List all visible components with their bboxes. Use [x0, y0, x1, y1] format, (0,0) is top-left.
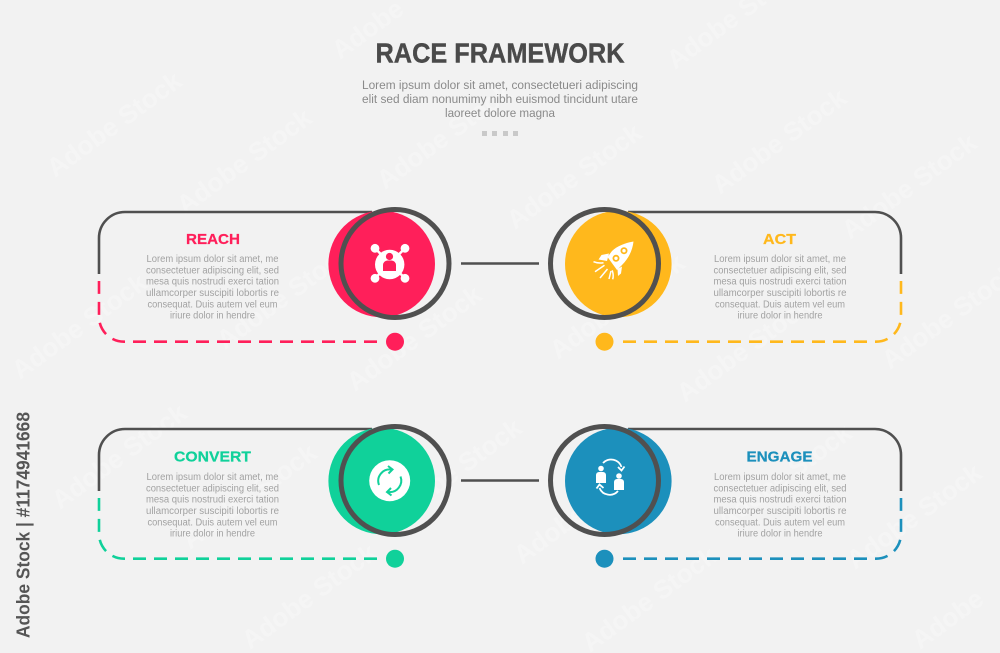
convert colour circle — [328, 428, 435, 534]
intro text: Lorem ipsum dolor sit amet, consectetueri adipiscing — [362, 78, 638, 92]
panel: convert — [99, 426, 449, 568]
engage body text: consectetuer adipiscing elit, sed — [714, 483, 846, 494]
watermark pattern: Adobe Stock — [236, 537, 383, 653]
engage outline — [628, 429, 901, 491]
reach end dot — [386, 333, 404, 351]
title: RACE FRAMEWORK — [376, 38, 625, 68]
engage body text: ullamcorper suscipiti lobortis re — [714, 506, 847, 517]
engage body text: iriure dolor in hendre — [738, 529, 823, 540]
watermark pattern: Adobe Stock — [501, 117, 648, 235]
convert dashed outline — [99, 498, 377, 559]
reach heading: REACH — [186, 231, 240, 248]
watermark pattern: Adobe Stock — [176, 437, 323, 555]
icon: reach audience — [371, 244, 409, 283]
side credit text: Adobe Stock | #1174941668 — [12, 412, 34, 638]
act body text: consectetuer adipiscing elit, sed — [714, 265, 846, 276]
connector: reach to act — [461, 262, 539, 265]
reach body text: mesa quis nostrudi exerci tation — [146, 277, 279, 288]
act heading: ACT — [763, 231, 796, 248]
reach body text — [146, 254, 279, 322]
watermark pattern: Adobe Stock — [836, 127, 983, 245]
reach outline — [99, 212, 372, 274]
engage colour circle — [565, 428, 672, 534]
convert body text — [146, 472, 279, 540]
act body text: iriure dolor in hendre — [738, 311, 823, 322]
convert body text: consequat. Duis autem vel eum — [148, 517, 278, 528]
watermark pattern: Adobe Stock — [46, 397, 193, 515]
watermark pattern: Adobe Stock — [671, 290, 818, 408]
convert ring — [341, 426, 449, 534]
watermark pattern: Adobe Stock — [211, 237, 358, 355]
reach dashed outline — [99, 281, 377, 342]
act body text: mesa quis nostrudi exerci tation — [714, 277, 846, 288]
reach colour circle — [328, 211, 435, 317]
act end dot — [596, 333, 614, 351]
watermark pattern: Adobe Stock — [171, 102, 318, 220]
act body text: ullamcorper suscipiti lobortis re — [714, 288, 847, 299]
act outline — [628, 212, 901, 274]
engage body text: consequat. Duis autem vel eum — [715, 517, 845, 528]
act colour circle — [565, 211, 672, 317]
convert body text: Lorem ipsum dolor sit amet, me — [146, 472, 279, 483]
intro text: elit sed diam nonumimy nibh euismod tincidunt utare — [362, 92, 638, 106]
intro text — [362, 78, 638, 120]
act ring — [550, 210, 658, 318]
convert body text: ullamcorper suscipiti lobortis re — [146, 506, 279, 517]
title dots — [482, 131, 518, 136]
watermark pattern: Adobe Stock — [381, 412, 528, 530]
act body text: Lorem ipsum dolor sit amet, me — [714, 254, 846, 265]
act body text: consequat. Duis autem vel eum — [715, 299, 845, 310]
intro text: laoreet dolore magna — [445, 106, 555, 120]
reach body text: ullamcorper suscipiti lobortis re — [146, 288, 279, 299]
convert body text: iriure dolor in hendre — [170, 529, 255, 540]
convert end dot — [386, 550, 404, 568]
reach ring — [341, 210, 449, 318]
watermark pattern: Adobe Stock — [544, 247, 691, 365]
icon: people exchange — [596, 459, 624, 495]
reach body text: consectetuer adipiscing elit, sed — [146, 265, 279, 276]
engage body text — [714, 472, 847, 540]
watermark pattern: Adobe — [906, 583, 989, 653]
engage dashed outline — [623, 498, 901, 559]
icon: rocket — [594, 242, 634, 279]
act dashed outline — [623, 281, 901, 342]
watermark pattern: Adobe Stock — [6, 267, 153, 385]
watermark pattern: Adobe Stock — [371, 77, 518, 195]
convert outline — [99, 429, 372, 491]
reach body text: iriure dolor in hendre — [170, 311, 255, 322]
convert body text: consectetuer adipiscing elit, sed — [146, 483, 279, 494]
watermark pattern: Adobe Stock — [341, 279, 488, 397]
engage end dot — [596, 550, 614, 568]
watermark pattern: Adobe Stock — [508, 452, 655, 570]
engage ring — [550, 426, 658, 534]
panel: act — [550, 210, 901, 351]
connector: convert to engage — [461, 479, 539, 482]
watermark pattern: Adobe Stock — [711, 417, 858, 535]
engage body text: Lorem ipsum dolor sit amet, me — [714, 472, 846, 483]
watermark pattern: Adobe Stock — [706, 82, 853, 200]
icon: refresh — [369, 460, 410, 501]
convert body text: mesa quis nostrudi exerci tation — [146, 495, 279, 506]
engage body text: mesa quis nostrudi exerci tation — [714, 495, 846, 506]
watermark pattern: Adobe Stock — [41, 65, 188, 183]
panel: reach — [99, 210, 449, 351]
panel: engage — [550, 426, 901, 568]
convert heading: CONVERT — [174, 448, 251, 466]
watermark pattern: Adobe Stock — [841, 457, 988, 575]
act body text — [714, 254, 847, 322]
engage heading: ENGAGE — [746, 448, 812, 466]
reach body text: Lorem ipsum dolor sit amet, me — [146, 254, 279, 265]
reach body text: consequat. Duis autem vel eum — [148, 299, 278, 310]
